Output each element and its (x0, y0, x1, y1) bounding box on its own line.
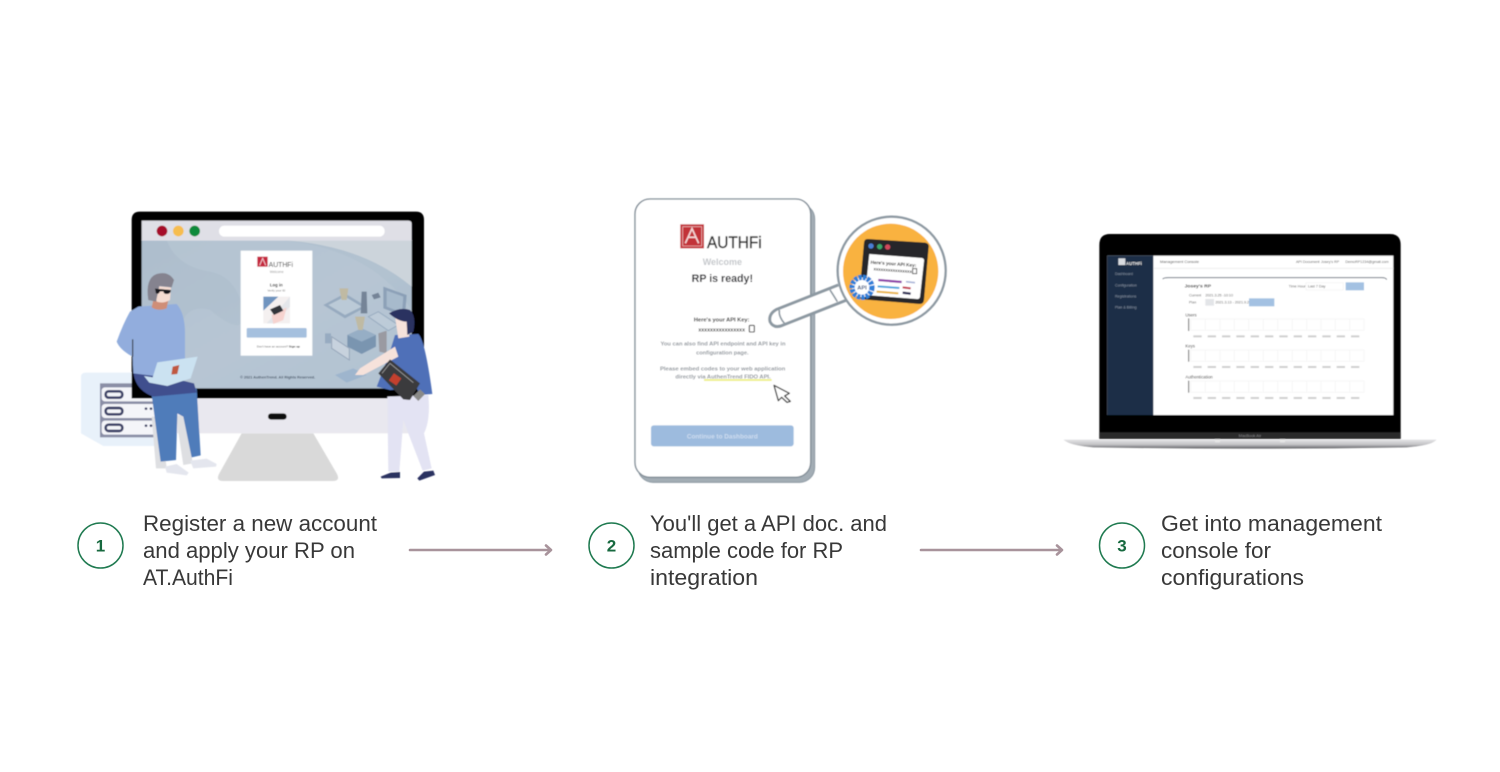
time range select (1289, 282, 1364, 290)
sweater (117, 304, 185, 377)
plan row: Plan (1189, 301, 1196, 305)
sidebar: Plan & Billing (1115, 306, 1137, 310)
sunglasses (155, 289, 171, 294)
chart: authentication: Authentication (1185, 375, 1213, 380)
API key value (698, 325, 754, 333)
time range select: Last 7 Day (1308, 285, 1326, 289)
step 1 text: and apply your RP on (143, 538, 355, 563)
step 2 badge: 2 (607, 536, 616, 556)
step 3 text (1161, 511, 1382, 590)
hips (133, 372, 197, 397)
continue button: Continue to Dashboard (687, 433, 758, 440)
chart: keys: Keys (1185, 344, 1195, 349)
embed note: Please embed codes to your web application (660, 366, 786, 372)
plan row: 2021.3.25 -10:10 (1205, 294, 1233, 298)
monitor frame (132, 212, 424, 398)
API gear badge: API (857, 285, 867, 291)
sidebar (1107, 256, 1153, 415)
logo: AUTHFi (269, 260, 293, 269)
laptop (144, 357, 198, 386)
plan row (1189, 294, 1274, 306)
chart: users: Users (1185, 313, 1197, 318)
chart: authentication (1185, 375, 1364, 398)
plan row: 2021.3.13 - 2021.9.28 (1215, 301, 1251, 305)
card (635, 199, 811, 477)
step 1 text: AT.AuthFi (143, 565, 233, 590)
window buttons (157, 226, 200, 236)
address bar (219, 226, 385, 237)
leg shadows (152, 413, 193, 468)
icon: mouse cursor (774, 385, 790, 402)
illustration: RP is ready phone card with magnifier (635, 199, 946, 482)
neck (152, 300, 168, 310)
security key picture (263, 297, 290, 324)
step 3 text: Get into management (1161, 511, 1382, 536)
t-shirt (377, 334, 432, 395)
welcome: Welcome (703, 257, 742, 267)
verify caption: Verify your ID (267, 289, 286, 293)
step 1 text (143, 511, 377, 590)
monitor stand (218, 433, 338, 481)
chart: keys (1185, 344, 1364, 367)
step 3 badge (1100, 523, 1144, 568)
arm (355, 347, 398, 375)
face (395, 315, 409, 338)
sign up text: Don't have an account? Sign up (257, 344, 300, 348)
legs (152, 387, 201, 462)
hair (148, 273, 174, 302)
top bar: Management Console (1160, 259, 1200, 264)
step 1 text: Register a new account (143, 511, 377, 536)
isometric office scene (323, 287, 407, 383)
step 2 text: integration (650, 565, 758, 590)
step 2 badge (589, 523, 634, 568)
step 3 (1100, 511, 1382, 590)
time range select: Time Hour (1289, 285, 1306, 289)
logo (680, 224, 762, 252)
top bar: DemoRP1234@gmail.com (1345, 260, 1389, 264)
welcome text: Welcome (270, 270, 284, 274)
illustration: laptop with management console (1063, 234, 1437, 449)
step 3 text: console for (1161, 538, 1271, 563)
configuration note: You can also find API endpoint and API key in (660, 342, 786, 348)
API key value: xxxxxxxxxxxxxxxx (698, 327, 746, 333)
step 2 text: sample code for RP (650, 538, 843, 563)
sidebar: Registrations (1115, 295, 1137, 299)
plan row: Current (1189, 294, 1201, 298)
laptop base (1063, 440, 1437, 449)
copyright footer: © 2021 AuthenTrend. All Rights Reserved. (240, 374, 315, 379)
hinge bar (1099, 432, 1401, 442)
person: woman with laptop (117, 273, 217, 475)
laptop lid (1099, 234, 1401, 439)
face (155, 286, 171, 303)
step 2 text (650, 511, 887, 590)
illustration: RP is ready phone card with magnifier: configuration page. (696, 350, 749, 356)
login card (241, 251, 312, 356)
chart: users (1185, 313, 1364, 336)
black security key (378, 359, 425, 401)
magnifier lens (838, 217, 946, 325)
mini browser: xxxxxxxxxxxxxxxx (873, 266, 913, 274)
step 2 (589, 511, 887, 590)
monitor chin (170, 398, 424, 433)
continue button (651, 425, 794, 446)
arrow: step 2 to step 3 (921, 546, 1062, 554)
hair (389, 309, 414, 335)
trousers (387, 395, 432, 472)
icon: server rack (81, 373, 167, 446)
API key label: Here's your API Key: (694, 318, 750, 324)
RP is ready heading: RP is ready! (692, 273, 753, 285)
illustration: RP is ready phone card with magnifier: directly via AuthenTrend FIDO API. (675, 375, 771, 381)
login button (247, 328, 307, 338)
sidebar: AUTHFi (1126, 261, 1142, 266)
step 3 badge: 3 (1117, 536, 1127, 556)
step 1 badge (78, 523, 123, 568)
RP title: Josey's RP (1185, 284, 1212, 290)
magnifier handle (770, 285, 847, 327)
console card top rule (1163, 278, 1387, 280)
sidebar: Configuration (1115, 283, 1137, 287)
top bar: API Document (1296, 260, 1320, 264)
top bar: Josey's RP (1321, 260, 1340, 264)
shoes (381, 472, 400, 478)
monitor power button (268, 413, 287, 420)
step 1 (78, 511, 377, 590)
person: man with security key (355, 309, 435, 481)
hinge bar: MacBook Air (1239, 433, 1262, 438)
sidebar: Dashboard (1115, 272, 1133, 276)
step 2 text: You'll get a API doc. and (650, 511, 887, 536)
mini browser: Here's your API Key: (870, 260, 917, 268)
arrow: step 1 to step 2 (410, 546, 551, 554)
card shadow layer (638, 204, 815, 482)
yellow highlight (704, 377, 772, 383)
mini browser (859, 239, 929, 304)
step 1 badge: 1 (96, 536, 105, 556)
top bar (1154, 259, 1393, 268)
shoes (165, 464, 189, 475)
log in heading: Log in (270, 282, 283, 287)
logo: AUTHFi (707, 233, 762, 252)
step 3 text: configurations (1161, 565, 1304, 590)
console screen (1107, 256, 1393, 415)
monitor screen (142, 221, 412, 388)
illustration: monitor with login page and two people (81, 212, 435, 481)
